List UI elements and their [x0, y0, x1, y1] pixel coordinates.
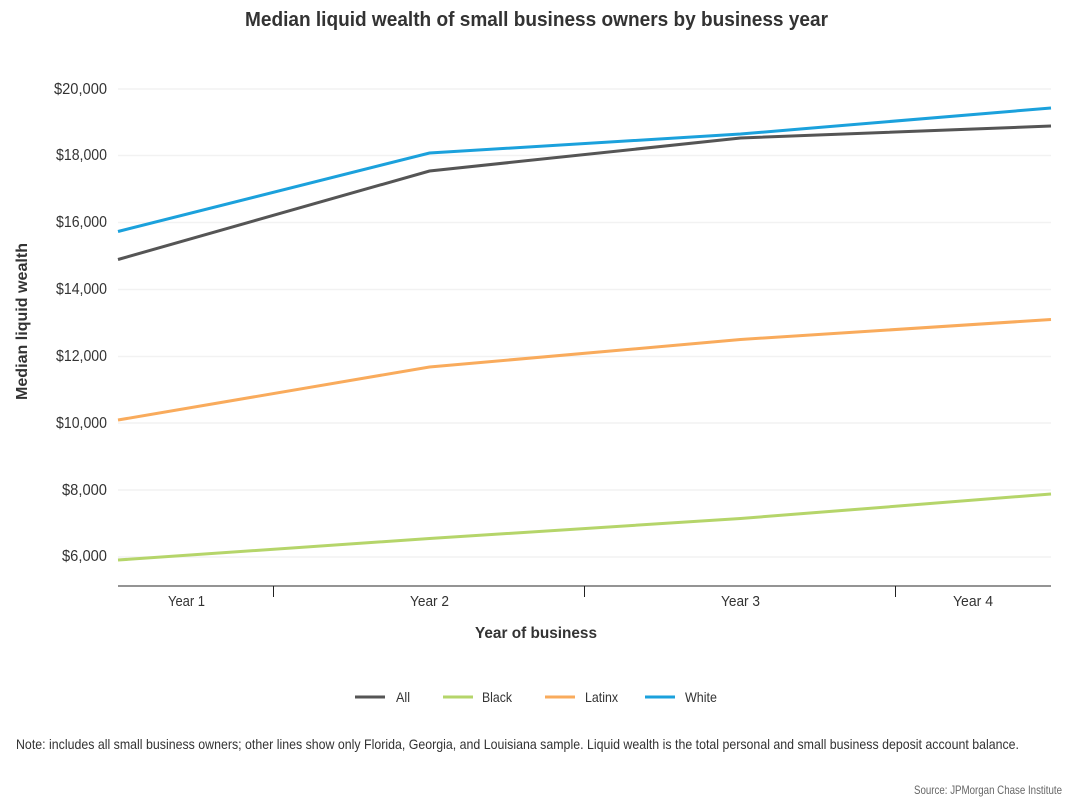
line: All — [118, 126, 1051, 260]
y axis title: Median liquid wealth — [14, 243, 31, 400]
y axis labels — [54, 81, 107, 565]
x axis labels: Year 4 — [953, 593, 993, 610]
y axis labels: $6,000 — [62, 548, 107, 565]
legend: All — [396, 689, 410, 705]
line: White — [118, 108, 1051, 232]
y axis labels: $20,000 — [54, 81, 107, 98]
x axis title: Year of business — [475, 625, 597, 642]
legend — [355, 689, 717, 705]
legend: Black — [482, 689, 513, 705]
x axis labels — [168, 593, 993, 610]
x axis labels: Year 3 — [721, 593, 760, 610]
legend: White — [685, 689, 717, 705]
x axis labels: Year 2 — [410, 593, 449, 610]
y axis labels: $14,000 — [56, 281, 107, 298]
line: Black — [118, 494, 1051, 560]
legend: Latinx — [585, 689, 618, 705]
line: Latinx — [118, 320, 1051, 420]
y axis labels: $18,000 — [56, 147, 107, 164]
title: Median liquid wealth of small business owners by business year — [245, 9, 828, 31]
y axis labels: $16,000 — [56, 214, 107, 231]
x axis — [118, 586, 1051, 597]
x axis labels: Year 1 — [168, 593, 205, 610]
y axis labels: $12,000 — [56, 348, 107, 365]
y axis labels: $10,000 — [56, 415, 107, 432]
y axis labels: $8,000 — [62, 482, 107, 499]
